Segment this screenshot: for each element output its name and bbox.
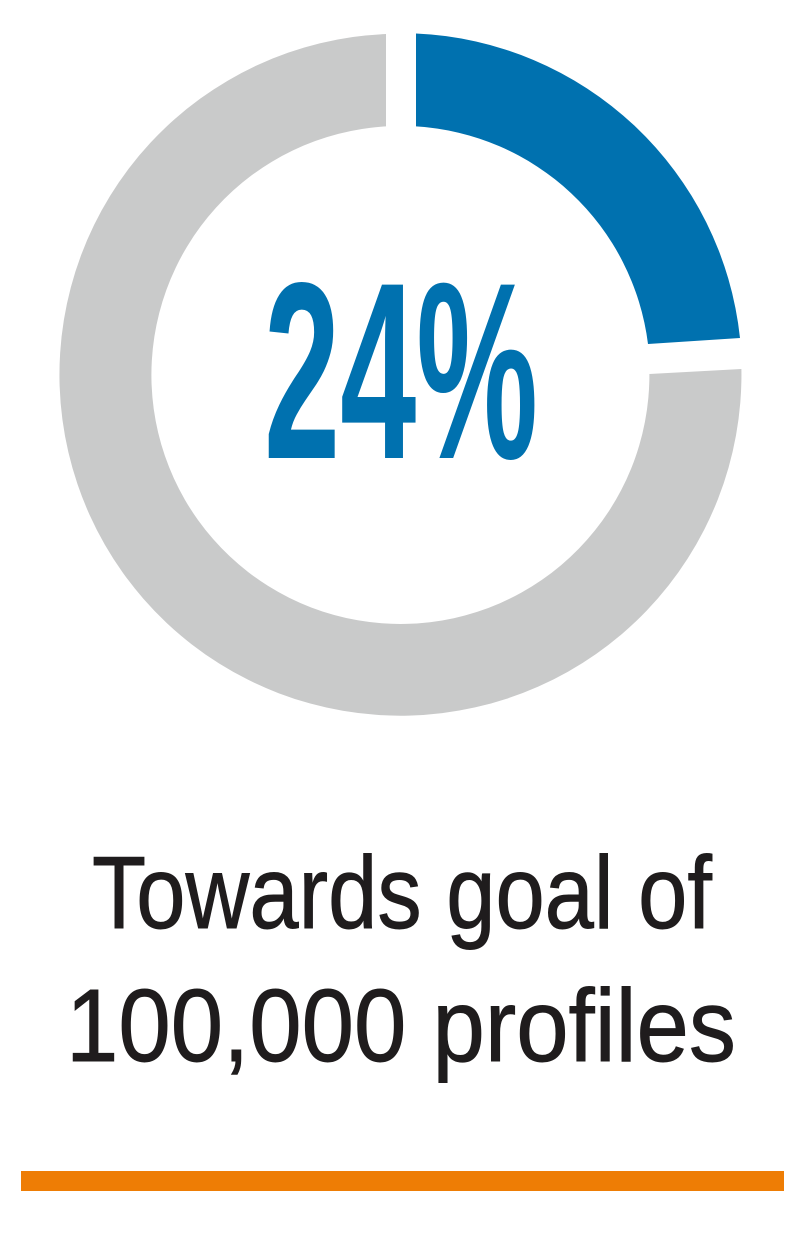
caption	[66, 835, 736, 1083]
donut segment: completed 24%	[416, 34, 740, 344]
orange accent bar	[21, 1171, 784, 1191]
caption line 2: 100,000 profiles	[66, 968, 736, 1083]
caption line 1: Towards goal of	[92, 835, 712, 950]
donut segment: remaining 76%	[59, 34, 741, 716]
percentage value: 24%	[264, 231, 538, 512]
donut chart	[59, 34, 741, 716]
